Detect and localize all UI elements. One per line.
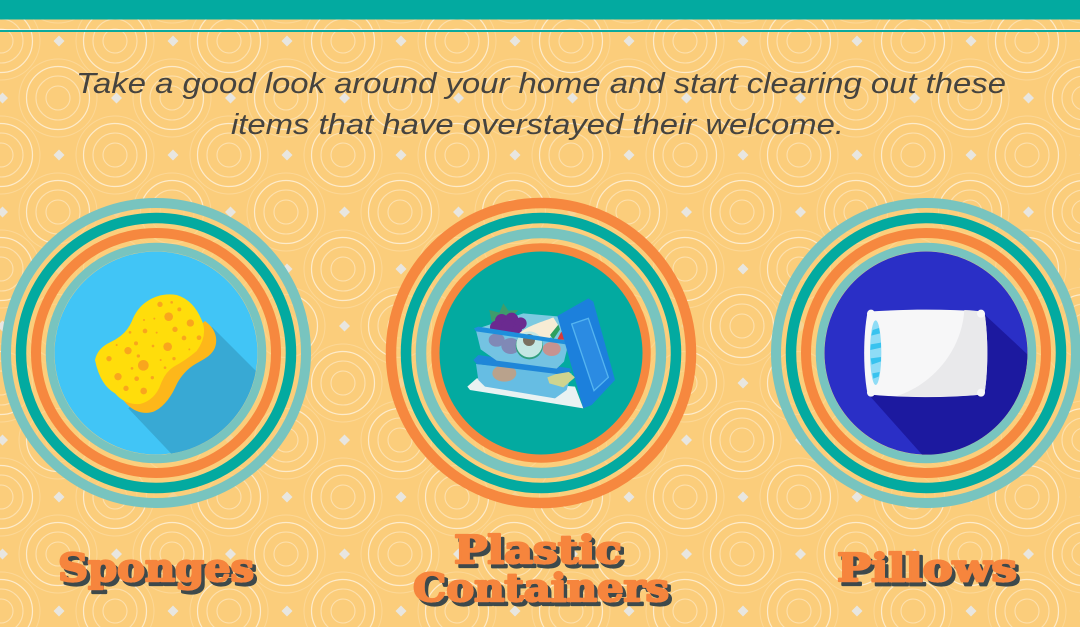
ring badge: plastic containers [391, 203, 691, 503]
ring badge: pillows [776, 203, 1076, 503]
icon: food containers [467, 298, 615, 408]
intro text [76, 68, 1006, 141]
intro text: Take a good look around your home and start clearing out these [76, 68, 1006, 100]
label: Plastic Containers: Plastic [454, 527, 622, 572]
label: Sponges: Sponges [58, 545, 254, 590]
icon: pillow [864, 310, 1032, 462]
label: Pillows: Pillows [837, 545, 1017, 590]
intro text: items that have overstayed their welcome. [231, 109, 844, 141]
label: Plastic Containers: Containers [413, 565, 669, 610]
icon: sponge [95, 294, 216, 413]
ring badge: sponges [6, 203, 306, 503]
label: Plastic Containers [413, 527, 669, 610]
top banner bar [0, 0, 1080, 32]
